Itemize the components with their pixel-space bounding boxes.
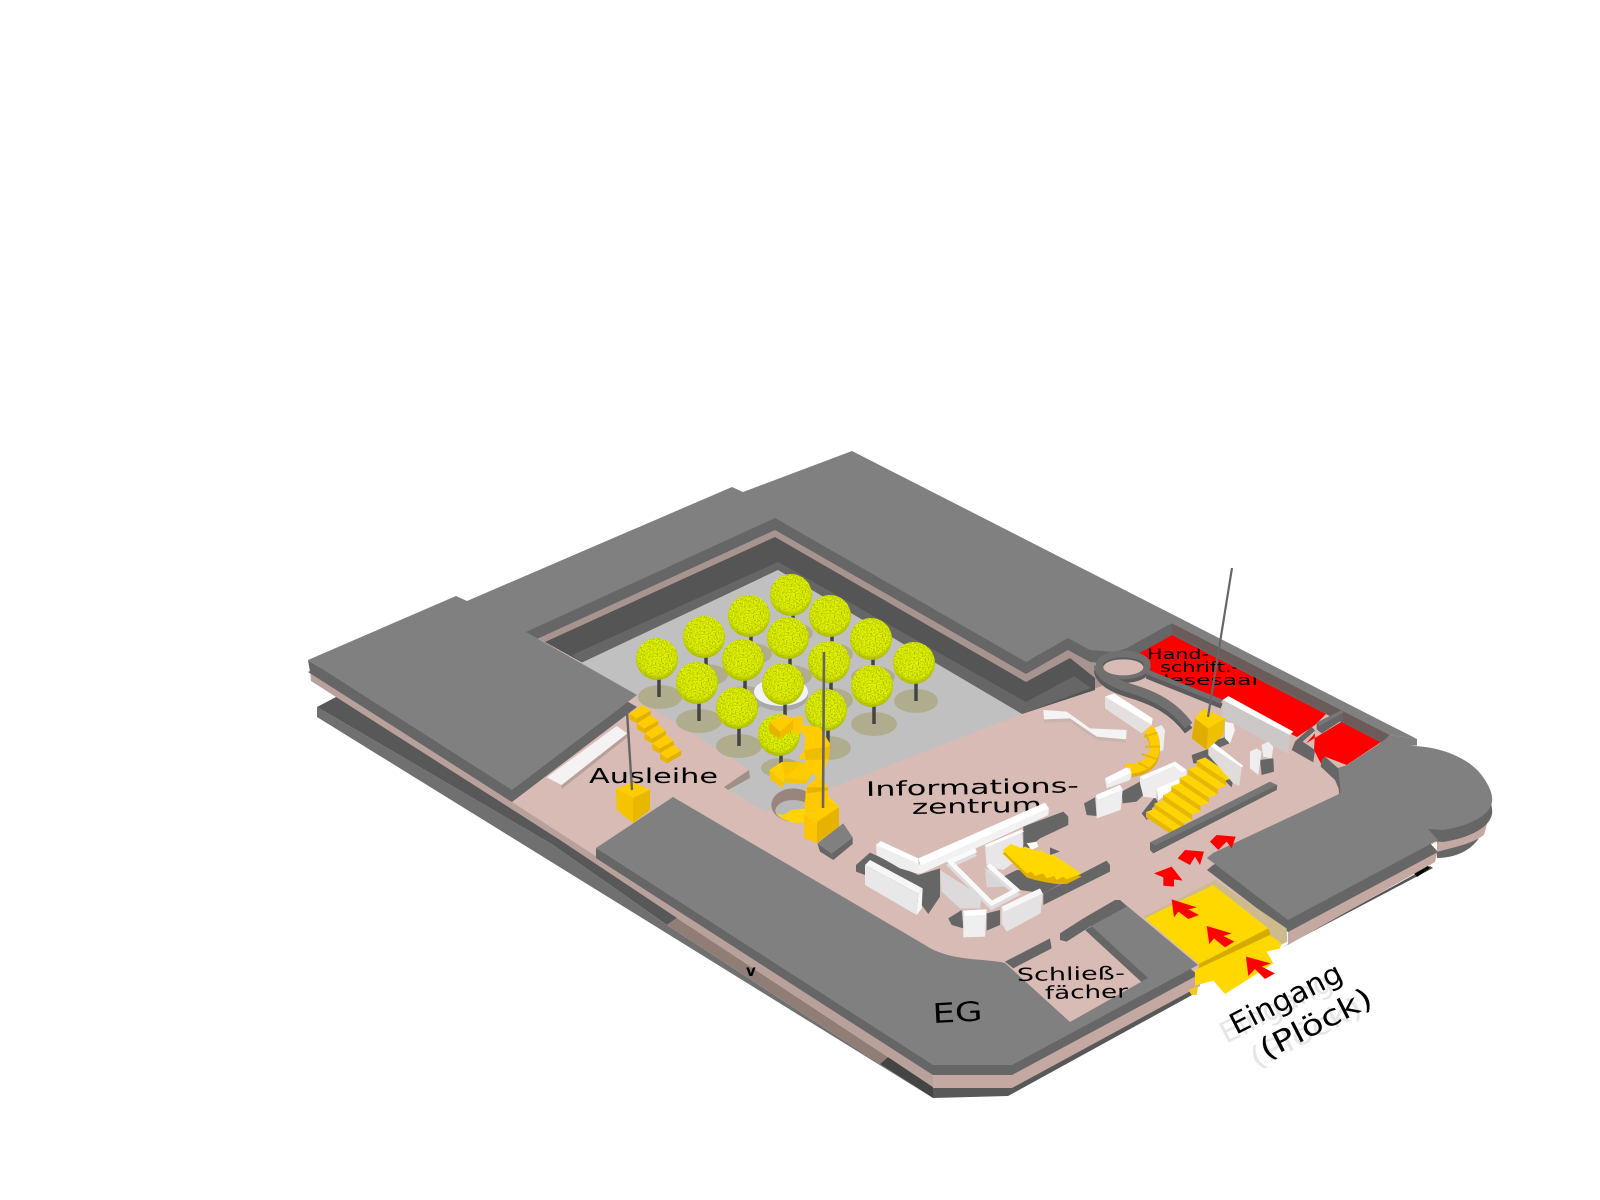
small spiral stair <box>1125 728 1160 773</box>
red arrow 3 <box>1246 957 1275 979</box>
red room wall faces <box>1127 623 1390 742</box>
white shelf by small stair <box>1105 693 1165 753</box>
right cluster: shelves, stairs and walls <box>1043 693 1293 853</box>
label: Schließfächer: Schließ- <box>1017 963 1125 986</box>
courtyard walls <box>526 518 1102 714</box>
small mark: v <box>746 962 756 980</box>
label: Informationszentrum: Informations- <box>866 773 1079 801</box>
floor: pink ground level <box>512 518 1440 1072</box>
wavy counter <box>1043 710 1127 743</box>
spiral staircase <box>769 714 838 817</box>
label: Eingang (Plöck) ghost: (Plöck) <box>1244 990 1368 1075</box>
label: Ausleihe: Ausleihe <box>589 764 718 788</box>
pole: spiral stair <box>823 652 824 808</box>
roof: side faces <box>308 463 1492 1075</box>
long white wall <box>916 803 1049 873</box>
pole: Handschriften <box>1208 568 1232 717</box>
red arrow 5 <box>1178 850 1204 865</box>
label: Eingang (Plöck): Eingang <box>1224 956 1348 1041</box>
entrance glass frame <box>1143 880 1287 945</box>
elevator block: Handschriften <box>1192 708 1225 750</box>
main staircase <box>1146 757 1234 837</box>
elevator block: spiral stair <box>804 805 839 843</box>
pole and elevator block: Ausleihe <box>616 712 650 823</box>
red arrow 4 <box>1154 867 1183 887</box>
courtyard trees <box>636 574 935 773</box>
label: Eingang (Plöck) <box>1224 956 1378 1066</box>
stairwell opening <box>771 788 840 823</box>
wall stubs near lockers <box>1005 900 1127 968</box>
slab edge: pink side band <box>310 671 1492 1088</box>
shelf group centre <box>940 829 1024 908</box>
entrance platform with arrows <box>1143 835 1287 995</box>
dark bases <box>856 812 1110 931</box>
courtyard ground <box>581 570 1022 812</box>
tree planter ring <box>754 678 808 711</box>
interior walls by red room <box>1292 710 1343 793</box>
base level slab <box>317 697 1433 1098</box>
keyhole wall <box>1098 654 1222 731</box>
white block lower right <box>1002 888 1043 932</box>
white wall beside stairs <box>1208 742 1243 786</box>
small white piece <box>1027 842 1038 850</box>
roof: east wing with bay <box>1207 735 1492 920</box>
roof: south wing <box>596 797 1198 1065</box>
floor ledge by courtyard <box>724 770 750 790</box>
entrance mat <box>1195 935 1282 994</box>
grey service box <box>817 823 853 860</box>
label: Eingang (Plöck) ghost <box>1214 965 1368 1075</box>
label: Schließfächer <box>1017 963 1129 1004</box>
tree shadows <box>638 623 938 778</box>
label: Handschriften-Lesesaal <box>1147 647 1258 689</box>
label: Handschriften-Lesesaal: Hand- <box>1147 647 1209 663</box>
label: Eingang (Plöck) ghost: Eingang <box>1214 965 1338 1050</box>
large white shelf <box>1222 696 1293 754</box>
dark bases <box>1084 737 1274 820</box>
label: Eingang (Plöck): (Plöck) <box>1254 981 1378 1066</box>
entrance step <box>1199 928 1271 971</box>
label: Handschriften-Lesesaal: lesesaal <box>1163 673 1258 689</box>
label: Informationszentrum <box>866 773 1079 819</box>
white shelves middle <box>1096 762 1187 818</box>
curved white wall <box>876 841 918 873</box>
label: Handschriften-Lesesaal: schrift.- <box>1160 660 1239 676</box>
label: Schließfächer: fächer <box>1045 982 1129 1004</box>
roof: north and west wing <box>308 451 1417 790</box>
gold stair <box>1003 844 1082 884</box>
entrance mat edge <box>1188 986 1198 995</box>
label: EG: EG <box>932 996 983 1030</box>
shelves: information area <box>856 803 1110 937</box>
small white shelves <box>1225 722 1273 775</box>
stairs: Ausleihe <box>629 705 681 763</box>
white counter: Ausleihe <box>547 726 627 789</box>
red arrow 6 <box>1210 835 1236 850</box>
entrance floor <box>1145 885 1268 964</box>
red arrow 1 <box>1172 899 1199 919</box>
white block lower left <box>963 909 987 937</box>
white block left <box>865 860 923 915</box>
label: Informationszentrum: zentrum <box>912 793 1042 819</box>
long wall <box>1150 782 1277 853</box>
red room: Handschriften-Lesesaal <box>1135 633 1382 765</box>
red arrow 2 <box>1207 926 1234 947</box>
